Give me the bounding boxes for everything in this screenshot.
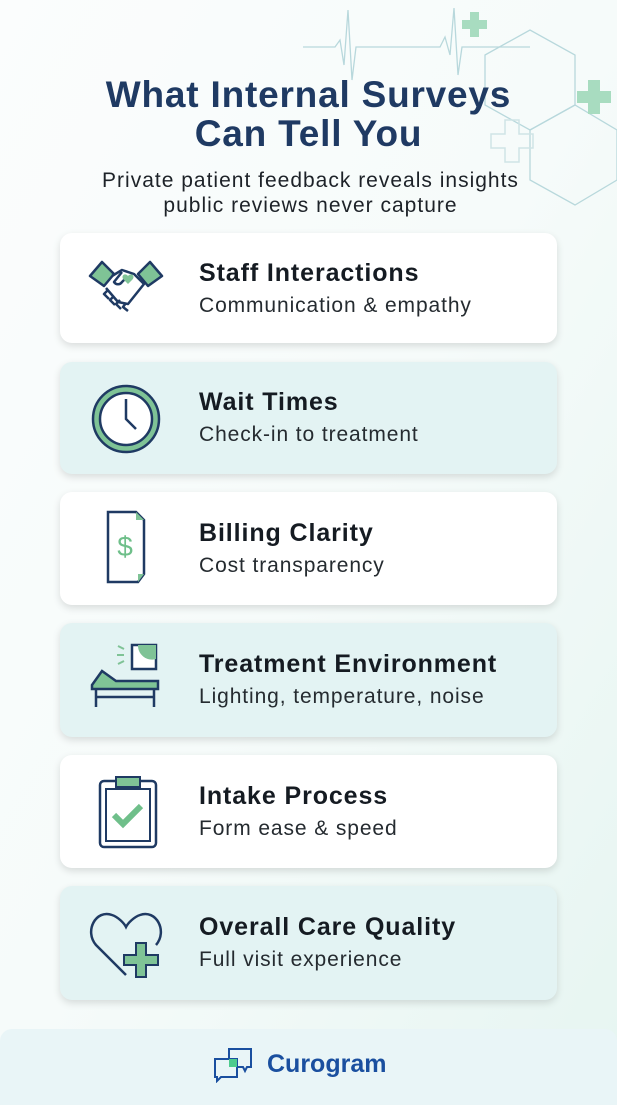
text: overall care quality: Overall Care Quality (199, 913, 456, 941)
title (106, 74, 511, 154)
subtitle: Private patient feedback reveals insights (102, 169, 519, 192)
panel: billing clarity (60, 492, 557, 605)
icon: bill document (106, 510, 146, 584)
panel: staff interactions: Communication & empathy (199, 294, 472, 317)
panel: intake process (60, 755, 557, 868)
text: wait times: Wait Times (199, 388, 339, 416)
panel: staff interactions (60, 233, 557, 343)
panel: intake process: Form ease & speed (199, 817, 398, 840)
icon: chat bubbles (214, 1048, 252, 1083)
icon: handshake (88, 260, 164, 312)
title: What Internal Surveys (106, 74, 511, 115)
panel: overall care quality: Full visit experience (199, 948, 402, 971)
panel: wait times: Check-in to treatment (199, 423, 419, 446)
icon: heart with cross (90, 912, 162, 978)
icon: treatment bed (90, 644, 160, 707)
panel: overall care quality (60, 886, 557, 1000)
logo: Curogram (214, 1048, 386, 1083)
title: Can Tell You (195, 113, 422, 154)
icon: bill document: $ (117, 531, 133, 562)
subtitle: public reviews never capture (163, 194, 458, 217)
logo: Curogram: Curogram (267, 1050, 386, 1078)
panel: billing clarity: Cost transparency (199, 554, 385, 577)
panel: treatment environment (60, 623, 557, 737)
panel: wait times (60, 362, 557, 474)
text: billing clarity: Billing Clarity (199, 519, 374, 547)
icon: clipboard (98, 776, 158, 848)
icon: clock (92, 384, 160, 454)
decorative background: heartbeat and hexagons (303, 8, 617, 206)
panel: treatment environment: Lighting, temperature, noise (199, 685, 485, 708)
footer (0, 1029, 617, 1105)
subtitle (102, 169, 519, 217)
text: staff interactions: Staff Interactions (199, 259, 419, 287)
text: treatment environment: Treatment Environment (199, 650, 497, 678)
text: intake process: Intake Process (199, 782, 388, 810)
